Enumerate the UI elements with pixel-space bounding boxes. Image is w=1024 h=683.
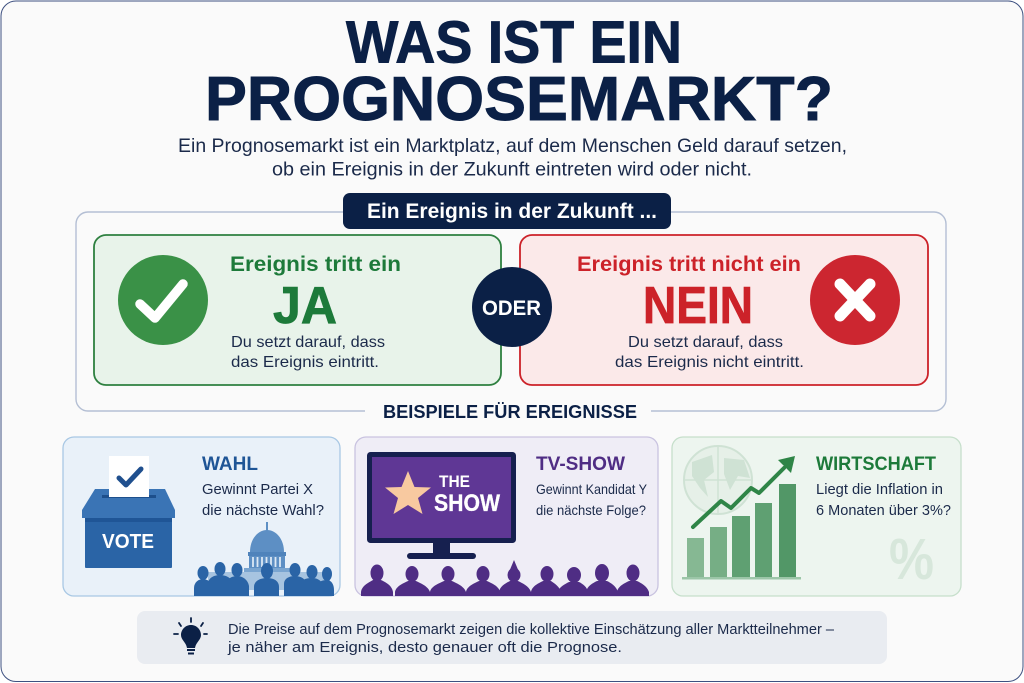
- yes description: das Ereignis eintritt.: [231, 354, 379, 371]
- bar chart: [682, 484, 801, 580]
- callout: takeaway: [137, 611, 887, 664]
- icon: globe: [684, 446, 752, 514]
- panel: election: [63, 437, 340, 596]
- intro text: Ein Prognosemarkt ist ein Marktplatz, auf dem Menschen Geld darauf setzen,: [178, 135, 847, 157]
- yes label: JA: [273, 277, 337, 335]
- no label: NEIN: [643, 277, 753, 335]
- illustration: capitol and crowd: [194, 522, 334, 596]
- callout text: Die Preise auf dem Prognosemarkt zeigen die kollektive Einschätzung aller Marktteilnehmer –: [228, 621, 835, 638]
- tv question: [536, 481, 648, 518]
- heading pill: event: [343, 193, 671, 229]
- section heading: examples: BEISPIELE FÜR EREIGNISSE: [383, 402, 637, 422]
- heading pill: event: Ein Ereignis in der Zukunft ...: [367, 200, 657, 223]
- icon: cross: [810, 255, 900, 345]
- icon: television: [370, 454, 514, 559]
- yes description: Du setzt darauf, dass: [231, 334, 385, 351]
- economy question: Liegt die Inflation in: [816, 481, 943, 498]
- arrow: growth: [693, 456, 795, 527]
- illustration: audience: [361, 560, 649, 596]
- callout text: je näher am Ereignis, desto genauer oft die Prognose.: [227, 639, 622, 656]
- election question: Gewinnt Partei X: [202, 481, 313, 498]
- title: [205, 10, 833, 134]
- no heading: Ereignis tritt nicht ein: [577, 253, 801, 276]
- icon: television: THE: [439, 472, 470, 491]
- no description: das Ereignis nicht eintritt.: [615, 354, 804, 371]
- yes description: [231, 334, 385, 371]
- no description: Du setzt darauf, dass: [628, 334, 783, 351]
- panel: event frame: [76, 212, 946, 411]
- badge: oder: ODER: [482, 297, 541, 320]
- panel: tv show: [355, 437, 658, 596]
- intro text: ob ein Ereignis in der Zukunft eintreten wird oder nicht.: [272, 158, 752, 180]
- election heading: WAHL: [202, 454, 258, 475]
- callout text: [227, 621, 835, 656]
- icon: ballot box: VOTE: [102, 531, 154, 553]
- tv question: die nächste Folge?: [536, 502, 646, 518]
- title: WAS IST EIN: [346, 10, 682, 76]
- election question: die nächste Wahl?: [202, 502, 324, 519]
- icon: check mark: [118, 255, 208, 345]
- panel: no: [520, 235, 928, 385]
- panel: economy: [672, 437, 961, 596]
- percent symbol: %: [889, 527, 934, 592]
- tv heading: TV-SHOW: [536, 454, 625, 475]
- economy question: 6 Monaten über 3%?: [816, 502, 951, 519]
- yes heading: Ereignis tritt ein: [230, 253, 401, 276]
- icon: light bulb: [174, 618, 207, 654]
- economy question: [816, 481, 951, 519]
- badge: oder: [472, 267, 552, 347]
- title: PROGNOSEMARKT?: [205, 65, 833, 134]
- election question: [202, 481, 324, 519]
- icon: ballot box: [82, 456, 175, 568]
- intro text: [178, 135, 847, 180]
- tv question: Gewinnt Kandidat Y: [536, 481, 648, 497]
- icon: television: SHOW: [434, 490, 500, 517]
- no description: [615, 334, 804, 371]
- panel: yes: [94, 235, 501, 385]
- economy heading: WIRTSCHAFT: [816, 454, 936, 475]
